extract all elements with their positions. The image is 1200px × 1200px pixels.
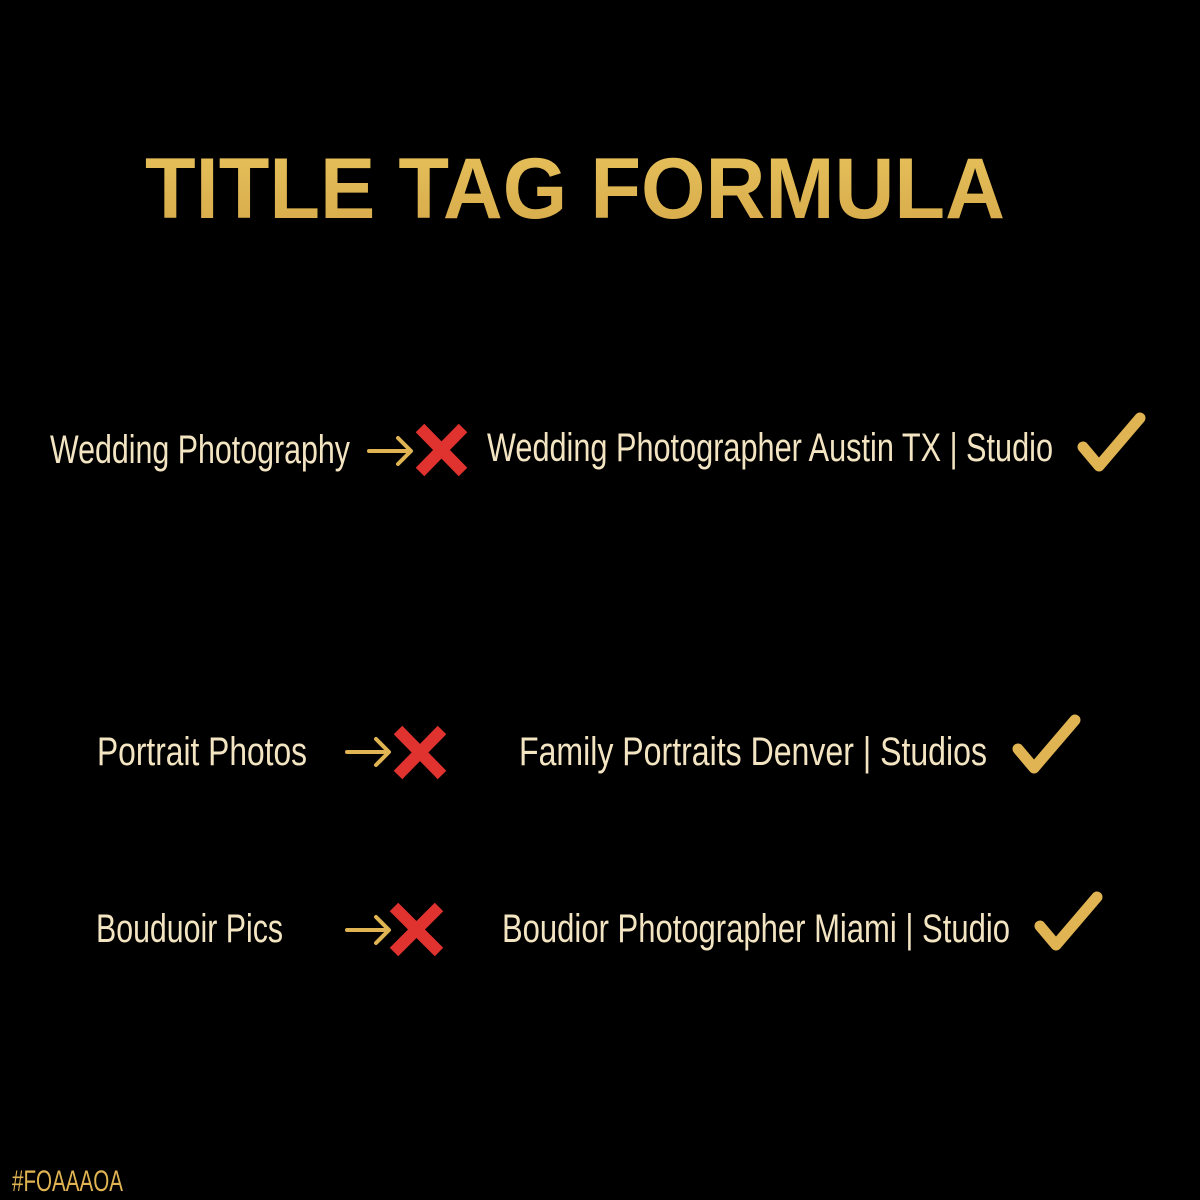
row 2 [97, 720, 1075, 775]
icon: check 3 [1040, 897, 1097, 945]
icon: red x 3 [394, 907, 439, 952]
row 3 [96, 897, 1097, 952]
text: bad title 2: Portrait Photos [97, 730, 307, 774]
arrow 3 [347, 917, 389, 943]
footer hashtag: #FOAAAOA [12, 1165, 123, 1198]
icon: check 1 [1083, 418, 1140, 466]
row 1 [50, 418, 1140, 472]
text: good title 3: Boudior Photographer Miami | Studio [502, 907, 1010, 951]
text: bad title 1: Wedding Photography [50, 428, 350, 472]
text: good title 2: Family Portraits Denver | Studios [519, 730, 987, 774]
arrow 2 [347, 739, 389, 765]
text: bad title 3: Bouduoir Pics [96, 907, 283, 951]
icon: check 2 [1018, 720, 1075, 768]
icon: red x 2 [398, 730, 442, 775]
arrow 1 [369, 438, 411, 464]
icon: red x 1 [420, 428, 463, 472]
title: TITLE TAG FORMULA [145, 141, 1005, 237]
